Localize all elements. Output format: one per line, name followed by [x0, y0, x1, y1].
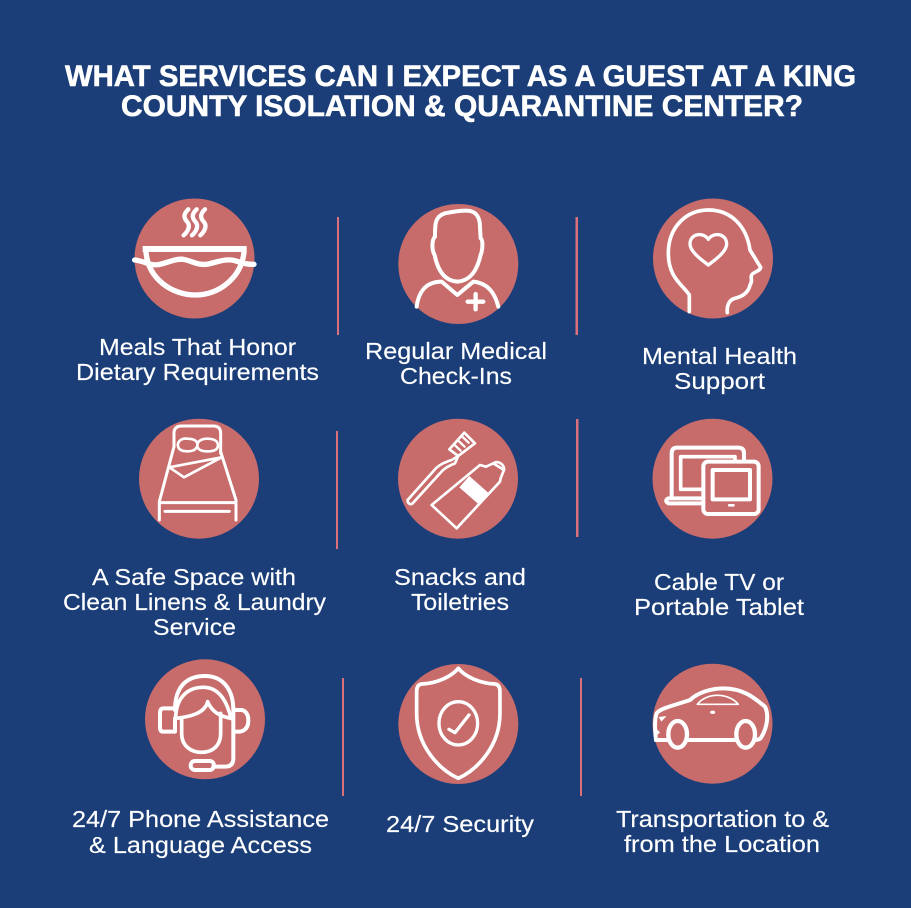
label: snacks and toiletries: Toiletries [411, 589, 509, 615]
label: mental health: Mental Health [642, 343, 797, 369]
label: phone assistance: 24/7 Phone Assistance [72, 806, 329, 832]
label: safe space: Service [153, 614, 236, 640]
panel: mental health [642, 198, 797, 394]
label: phone assistance [72, 806, 329, 858]
label: tv or tablet [634, 569, 805, 620]
icon: toothbrush and tube [408, 433, 504, 528]
label: snacks and toiletries: Snacks and [394, 564, 526, 590]
panel: snacks and toiletries [394, 419, 526, 615]
label: meals: Meals That Honor [99, 334, 296, 360]
panel: medical check-ins [365, 204, 547, 389]
icon: shield with check [417, 668, 500, 778]
icon: bed [159, 426, 236, 520]
icon: headset agent [160, 676, 248, 770]
label: transportation: Transportation to & [616, 806, 829, 832]
panel: safe space [63, 419, 327, 640]
label: meals: Dietary Requirements [76, 359, 319, 385]
label: transportation: from the Location [624, 831, 820, 857]
label: transportation [616, 806, 829, 857]
label: medical check-ins: Check-Ins [400, 363, 512, 389]
panel: phone assistance [72, 659, 329, 858]
label: security: 24/7 Security [386, 811, 535, 837]
icon: car [655, 688, 767, 748]
label: tv or tablet: Cable TV or [654, 569, 784, 595]
label: safe space [63, 564, 327, 640]
label: safe space: Clean Linens & Laundry [63, 589, 327, 615]
label: mental health: Support [674, 368, 766, 394]
title [65, 60, 856, 123]
label: meals [76, 334, 319, 385]
title: COUNTY ISOLATION & QUARANTINE CENTER? [121, 90, 803, 123]
label: snacks and toiletries [394, 564, 526, 615]
icon: head with heart [668, 210, 761, 313]
panel: meals [76, 198, 319, 385]
panel: tv or tablet [634, 419, 805, 620]
icon: steaming bowl [135, 209, 254, 295]
label: phone assistance: & Language Access [89, 832, 312, 858]
label: medical check-ins: Regular Medical [365, 338, 547, 364]
panel: security [386, 664, 535, 837]
icon: laptop and tablet [666, 448, 759, 514]
icon: medic [417, 211, 498, 309]
label: medical check-ins [365, 338, 547, 389]
label: tv or tablet: Portable Tablet [634, 594, 805, 620]
title: WHAT SERVICES CAN I EXPECT AS A GUEST AT A KING [65, 60, 856, 93]
label: safe space: A Safe Space with [92, 564, 296, 590]
label: mental health [642, 343, 797, 394]
panel: transportation [616, 664, 829, 857]
